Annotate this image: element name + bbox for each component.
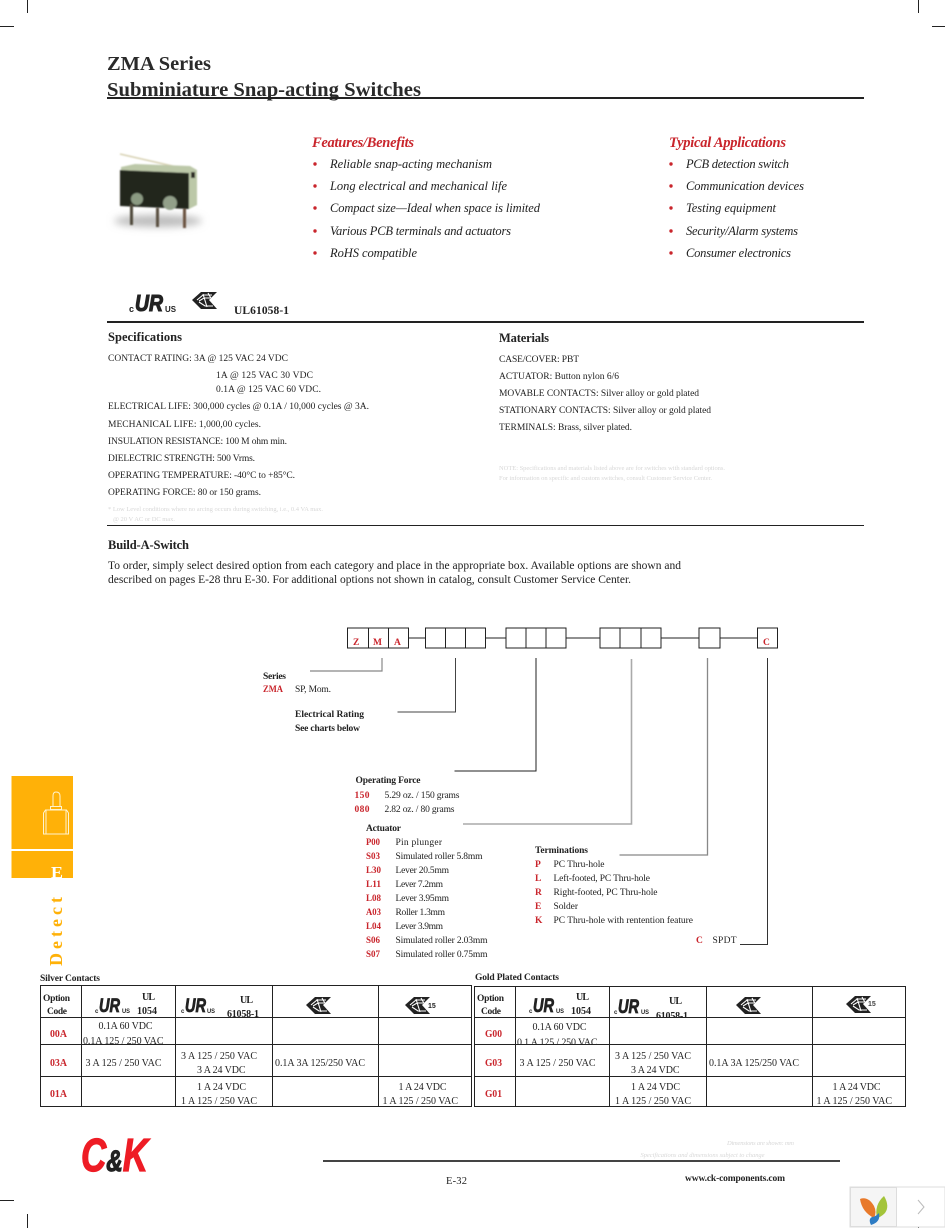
logo: C&K: C&K [81, 1129, 150, 1181]
option: terminations: P [535, 860, 541, 870]
side tab [12, 776, 73, 966]
table rows: 1 A 125 / 250 VAC [181, 1096, 257, 1107]
panel: typical applications [669, 135, 804, 260]
table header: UL [240, 995, 253, 1006]
table header: UR [618, 997, 639, 1018]
website: www.ck-components.com [685, 1174, 785, 1184]
option: actuator: Pin plunger [396, 838, 443, 848]
materials list: TERMINALS: Brass, silver plated. [499, 423, 632, 433]
specification list: 1A @ 125 VAC 30 VDC [216, 371, 313, 381]
heading: materials: Materials [499, 331, 549, 345]
panel: materials [499, 331, 725, 482]
bullet list: applications: Communication devices [686, 179, 804, 193]
bullet list: features: Various PCB terminals and actuators [330, 224, 511, 238]
heading: specifications: Specifications [108, 330, 182, 344]
table rows: 1 A 24 VDC [398, 1082, 447, 1093]
option: operating force: Operating Force [356, 776, 420, 786]
table header: UL [142, 992, 155, 1003]
table header: 61058-1 [656, 1011, 688, 1022]
materials list: ACTUATOR: Button nylon 6/6 [499, 372, 619, 382]
option: series: Series [263, 672, 286, 682]
bullet list: applications [669, 157, 804, 260]
table rows: 3 A 24 VDC [631, 1065, 680, 1076]
specification list: MECHANICAL LIFE: 1,000,00 cycles. [108, 420, 261, 430]
table rows: 0.1A 3A 125/250 VAC [275, 1058, 365, 1069]
table rows: 3 A 24 VDC [197, 1065, 246, 1076]
specification list: ELECTRICAL LIFE: 300,000 cycles @ 0.1A / 10,000 cycles @ 3A. [108, 402, 369, 412]
footer fine print [640, 1140, 794, 1159]
table header: c [181, 1009, 185, 1015]
option: series: SP, Mom. [295, 685, 331, 695]
table rows: 00A [50, 1029, 67, 1040]
icon: cULus mark: US [165, 304, 176, 314]
bullet list: applications: PCB detection switch [685, 157, 789, 171]
intro text: To order, simply select desired option from each category and place in the appropriate box. Available options are shown and [108, 560, 681, 572]
option: terminations: Right-footed, PC Thru-hole [554, 887, 658, 898]
icon: pin plunger switch [44, 792, 68, 834]
table header: 1054 [571, 1006, 591, 1017]
option: electrical rating [295, 710, 364, 734]
note: For information on specific and custom switches, consult Customer Service Center. [499, 475, 712, 482]
widget: viewer navigation [850, 1187, 945, 1227]
option: actuator: L04 [366, 922, 381, 932]
icon: chevron [918, 1200, 924, 1214]
table rows: 0.1A 60 VDC [98, 1021, 153, 1032]
bullet list: features: Long electrical and mechanical life [329, 179, 507, 193]
option: actuator: L30 [366, 866, 381, 876]
footer fine print: Dimensions are shown: mm [726, 1140, 794, 1147]
table rows: 1 A 125 / 250 VAC [816, 1096, 892, 1107]
table header: UR [533, 996, 554, 1017]
option: circuit: SPDT [712, 936, 737, 946]
option: series: ZMA [263, 685, 283, 695]
table header: 61058-1 [227, 1009, 259, 1020]
certification marks [129, 290, 289, 317]
specification list: DIELECTRIC STRENGTH: 500 Vrms. [108, 454, 255, 464]
specification list: OPERATING FORCE: 80 or 150 grams. [108, 488, 261, 498]
option: series [263, 672, 331, 695]
section letter: E [51, 863, 63, 882]
table rows [50, 1021, 458, 1107]
option: operating force: 5.29 oz. / 150 grams [384, 791, 460, 801]
table rows: 03A [50, 1058, 67, 1069]
table header: Code [481, 1007, 501, 1017]
table header: US [122, 1009, 130, 1015]
icon: approval chevron mark [192, 292, 217, 309]
table header: c [95, 1009, 99, 1015]
table header: c [529, 1009, 533, 1015]
option: terminations: K [535, 916, 543, 926]
label: UL61058-1: UL61058-1 [234, 305, 289, 317]
table rows: 01A [50, 1089, 67, 1100]
leader lines [310, 658, 768, 944]
table rows [485, 1022, 892, 1107]
footnote: * Low Level conditions where no arcing occurs during switching, i.e., 0.4 VA max. [108, 506, 323, 513]
panel: specifications [108, 330, 369, 523]
page number: E-32 [446, 1176, 467, 1187]
table header [43, 992, 436, 1020]
specification list: INSULATION RESISTANCE: 100 M ohm min. [108, 437, 287, 447]
rotated section label: Detect [46, 897, 66, 966]
icon: cULus mark: c [129, 304, 134, 314]
option: terminations: L [535, 874, 541, 884]
bullet list: features [313, 157, 541, 260]
table rows: 0.1A 60 VDC [532, 1022, 587, 1033]
option: operating force [354, 776, 460, 815]
option: electrical rating: See charts below [295, 724, 360, 734]
option: actuator: Roller 1.3mm [396, 908, 446, 918]
preset codes: M [373, 638, 382, 648]
intro text [108, 560, 681, 586]
table: silver contacts [40, 974, 472, 1107]
option: terminations: Solder [554, 902, 579, 912]
table header [477, 992, 876, 1022]
option: actuator [366, 824, 488, 960]
table header: 15 [428, 1003, 436, 1010]
heading: build-a-switch: Build-A-Switch [108, 538, 189, 552]
table: gold plated contacts [474, 973, 906, 1107]
panel: build-a-switch intro [108, 538, 681, 586]
bullet list: applications: Testing equipment [686, 201, 777, 215]
preset codes: Z [353, 638, 359, 648]
footnote: @ 20 V AC or DC max. [113, 516, 175, 523]
table header: US [207, 1009, 215, 1015]
option: circuit [696, 936, 737, 946]
table header: 1054 [137, 1006, 157, 1017]
table header: c [614, 1010, 618, 1016]
table rows: 3 A 125 / 250 VAC [86, 1058, 162, 1069]
title: Subminiature Snap-acting Switches [107, 79, 421, 101]
title: ZMA Series [107, 53, 211, 75]
table title: Gold Plated Contacts [475, 973, 559, 983]
option: terminations: Terminations [535, 846, 588, 856]
option: actuator: Lever 3.95mm [396, 894, 450, 904]
table rows: 1 A 125 / 250 VAC [615, 1096, 691, 1107]
bullet list: features: Reliable snap-acting mechanism [329, 157, 492, 171]
table header: UL [576, 992, 589, 1003]
option: electrical rating: Electrical Rating [295, 710, 364, 720]
specification list: 0.1A @ 125 VAC 60 VDC. [216, 385, 321, 395]
table header: UR [185, 996, 206, 1017]
specification list: OPERATING TEMPERATURE: -40°C to +85°C. [108, 470, 295, 481]
option: terminations [535, 846, 693, 926]
product photo: switch [114, 154, 202, 228]
specification list: CONTACT RATING: 3A @ 125 VAC 24 VDC [108, 354, 288, 364]
option: actuator: L08 [366, 894, 381, 904]
title [107, 53, 864, 101]
option: terminations: E [535, 902, 541, 912]
bullet list: applications: Consumer electronics [686, 246, 791, 260]
materials list: MOVABLE CONTACTS: Silver alloy or gold plated [499, 389, 699, 399]
footer fine print: Specifications and dimensions subject to change [640, 1152, 765, 1159]
table rows: 0.1A 3A 125/250 VAC [709, 1058, 799, 1069]
table rows: 1 A 24 VDC [631, 1082, 680, 1093]
option: circuit: C [696, 936, 703, 946]
table header: UL [669, 996, 682, 1007]
preset codes: C [763, 638, 770, 648]
option: actuator: Actuator [366, 824, 402, 834]
table header: 15 [868, 1001, 876, 1008]
table title: Silver Contacts [40, 974, 100, 984]
option: terminations: PC Thru-hole [554, 860, 604, 870]
panel: features and benefits [311, 135, 541, 260]
footer [81, 1129, 840, 1187]
table rows: 0.1 A 125 / 250 VAC [517, 1038, 598, 1048]
footnote [108, 506, 323, 523]
ordering code boxes [348, 628, 778, 648]
option: actuator: S03 [366, 852, 380, 862]
option: actuator: P00 [366, 838, 380, 848]
option: actuator: Lever 3.9mm [396, 922, 444, 932]
option: actuator: L11 [366, 880, 381, 890]
table rows: G00 [485, 1029, 502, 1040]
option: actuator: Simulated roller 5.8mm [396, 852, 483, 862]
note: NOTE: Specifications and materials listed above are for switches with standard options. [499, 465, 725, 472]
bullet list: features: Compact size—Ideal when space is limited [330, 201, 541, 215]
table rows: 1 A 24 VDC [832, 1082, 881, 1093]
table rows: 3 A 125 / 250 VAC [181, 1051, 257, 1062]
bullet list: features: RoHS compatible [329, 246, 417, 260]
heading: features: Features/Benefits [311, 135, 414, 151]
option: operating force: 150 [354, 791, 370, 801]
option: actuator: S06 [366, 936, 380, 946]
option: actuator: Simulated roller 0.75mm [396, 950, 488, 960]
specification list [108, 354, 369, 498]
table rows: 3 A 125 / 250 VAC [615, 1051, 691, 1062]
bullet list: applications: Security/Alarm systems [686, 224, 798, 238]
table rows: 0.1A 125 / 250 VAC [83, 1036, 164, 1047]
table header: Code [47, 1007, 67, 1017]
option: terminations: PC Thru-hole with rentention feature [554, 915, 693, 926]
table header: Option [43, 994, 71, 1004]
heading: applications: Typical Applications [669, 135, 786, 151]
table header: UR [99, 996, 120, 1017]
materials list: STATIONARY CONTACTS: Silver alloy or gold plated [499, 406, 711, 416]
materials list: CASE/COVER: PBT [499, 355, 579, 365]
table header: US [556, 1009, 564, 1015]
option: actuator: A03 [366, 908, 381, 918]
table rows: 1 A 24 VDC [197, 1082, 246, 1093]
intro text: described on pages E-28 thru E-30. For additional options not shown in catalog, consult Customer Service Center. [108, 574, 631, 586]
materials list [499, 355, 711, 433]
note [499, 465, 725, 482]
option: actuator: Lever 20.5mm [396, 866, 450, 876]
table header: US [641, 1010, 649, 1016]
table rows: 3 A 125 / 250 VAC [520, 1058, 596, 1069]
table rows: G01 [485, 1089, 502, 1100]
table header: Option [477, 994, 505, 1004]
preset codes [353, 638, 770, 648]
option: operating force: 2.82 oz. / 80 grams [384, 805, 455, 815]
icon: cULus mark: UR [135, 290, 163, 316]
option: operating force: 080 [354, 805, 370, 815]
option: terminations: R [535, 888, 542, 898]
footer rule [323, 1160, 840, 1162]
option: actuator: S07 [366, 950, 380, 960]
icon: petal logo [860, 1196, 887, 1225]
option: actuator: Simulated roller 2.03mm [396, 936, 488, 946]
table rows: 1 A 125 / 250 VAC [382, 1096, 458, 1107]
option: actuator: Lever 7.2mm [396, 880, 444, 890]
preset codes: A [394, 638, 401, 648]
table rows: G03 [485, 1058, 502, 1069]
option: terminations: Left-footed, PC Thru-hole [554, 873, 650, 884]
